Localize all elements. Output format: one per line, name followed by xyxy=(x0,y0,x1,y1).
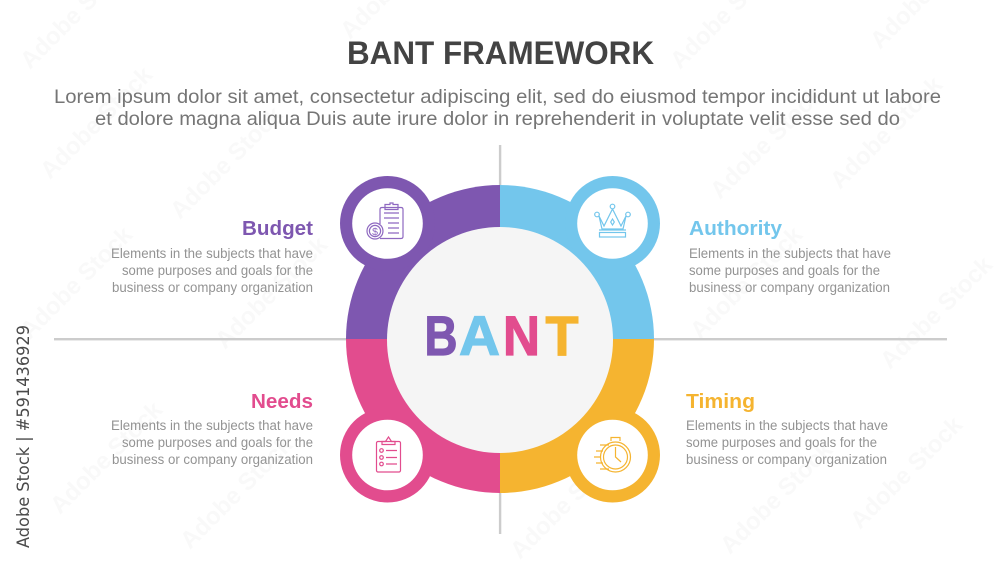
text block: timing xyxy=(686,391,888,467)
text block: authority: Authority xyxy=(689,218,783,240)
text block: budget: Elements in the subjects that have xyxy=(111,246,313,261)
axis cross lines xyxy=(54,145,947,534)
text block: budget: some purposes and goals for the xyxy=(122,263,313,278)
stock id side label: Adobe Stock | #591436929 xyxy=(14,325,34,548)
icon: authority crown xyxy=(577,188,648,259)
text: Adobe Stock xyxy=(165,101,288,224)
text block: budget xyxy=(111,218,313,295)
subtitle text: et dolore magna aliqua Duis aute irure dolor in reprehenderit in voluptate velit esse sed do xyxy=(95,108,900,130)
text block: budget: Budget xyxy=(242,218,313,240)
center word BANT: A xyxy=(459,304,500,367)
text block: timing: some purposes and goals for the xyxy=(686,435,877,450)
text block: budget: business or company organization xyxy=(112,280,313,295)
text: Adobe Stock xyxy=(175,431,298,554)
title: BANT FRAMEWORK xyxy=(347,35,654,71)
text block: needs: Elements in the subjects that have xyxy=(111,418,313,433)
segment: authority blue xyxy=(500,176,660,339)
text block: needs xyxy=(111,391,313,467)
text block: timing: Timing xyxy=(686,391,755,413)
text: Adobe Stock xyxy=(35,61,158,184)
icon: budget clipboard and coin xyxy=(352,188,423,259)
text block: authority: Elements in the subjects that have xyxy=(689,246,891,261)
segment: needs pink xyxy=(340,339,500,502)
icon: budget clipboard and coin: $ xyxy=(372,226,378,238)
icon: needs checklist xyxy=(352,420,423,490)
subtitle text: Lorem ipsum dolor sit amet, consectetur adipiscing elit, sed do eiusmod tempor incididunt ut labore xyxy=(54,86,941,108)
subtitle text xyxy=(54,86,941,130)
text block: timing: Elements in the subjects that have xyxy=(686,418,888,433)
text block: needs: some purposes and goals for the xyxy=(122,435,313,450)
text: Adobe Stock xyxy=(705,81,828,204)
center word BANT: T xyxy=(546,304,578,367)
text: Adobe Stock xyxy=(45,396,168,519)
text block: authority xyxy=(689,218,891,295)
text block: authority: some purposes and goals for the xyxy=(689,263,880,278)
text: Adobe Stock xyxy=(845,411,968,534)
text: Adobe Stock xyxy=(875,251,998,374)
text block: timing: business or company organization xyxy=(686,452,887,467)
text: Adobe Stock xyxy=(15,221,138,344)
center word BANT: B xyxy=(424,304,458,367)
text block: authority: business or company organization xyxy=(689,280,890,295)
text block: needs: business or company organization xyxy=(112,452,313,467)
icon: timing stopwatch xyxy=(577,420,648,490)
text: Adobe Stock xyxy=(715,436,838,559)
center word BANT: N xyxy=(503,304,540,367)
segment: budget purple xyxy=(340,176,500,339)
text: Adobe Stock xyxy=(210,231,333,354)
central ring diagram xyxy=(340,176,660,502)
inner circle xyxy=(387,227,613,453)
text: Adobe Stock xyxy=(685,221,808,344)
center word BANT xyxy=(424,304,578,367)
text: Adobe Stock xyxy=(825,71,948,194)
text: Adobe Stock xyxy=(505,441,628,563)
text block: needs: Needs xyxy=(251,391,313,413)
segment: timing yellow xyxy=(500,339,660,502)
